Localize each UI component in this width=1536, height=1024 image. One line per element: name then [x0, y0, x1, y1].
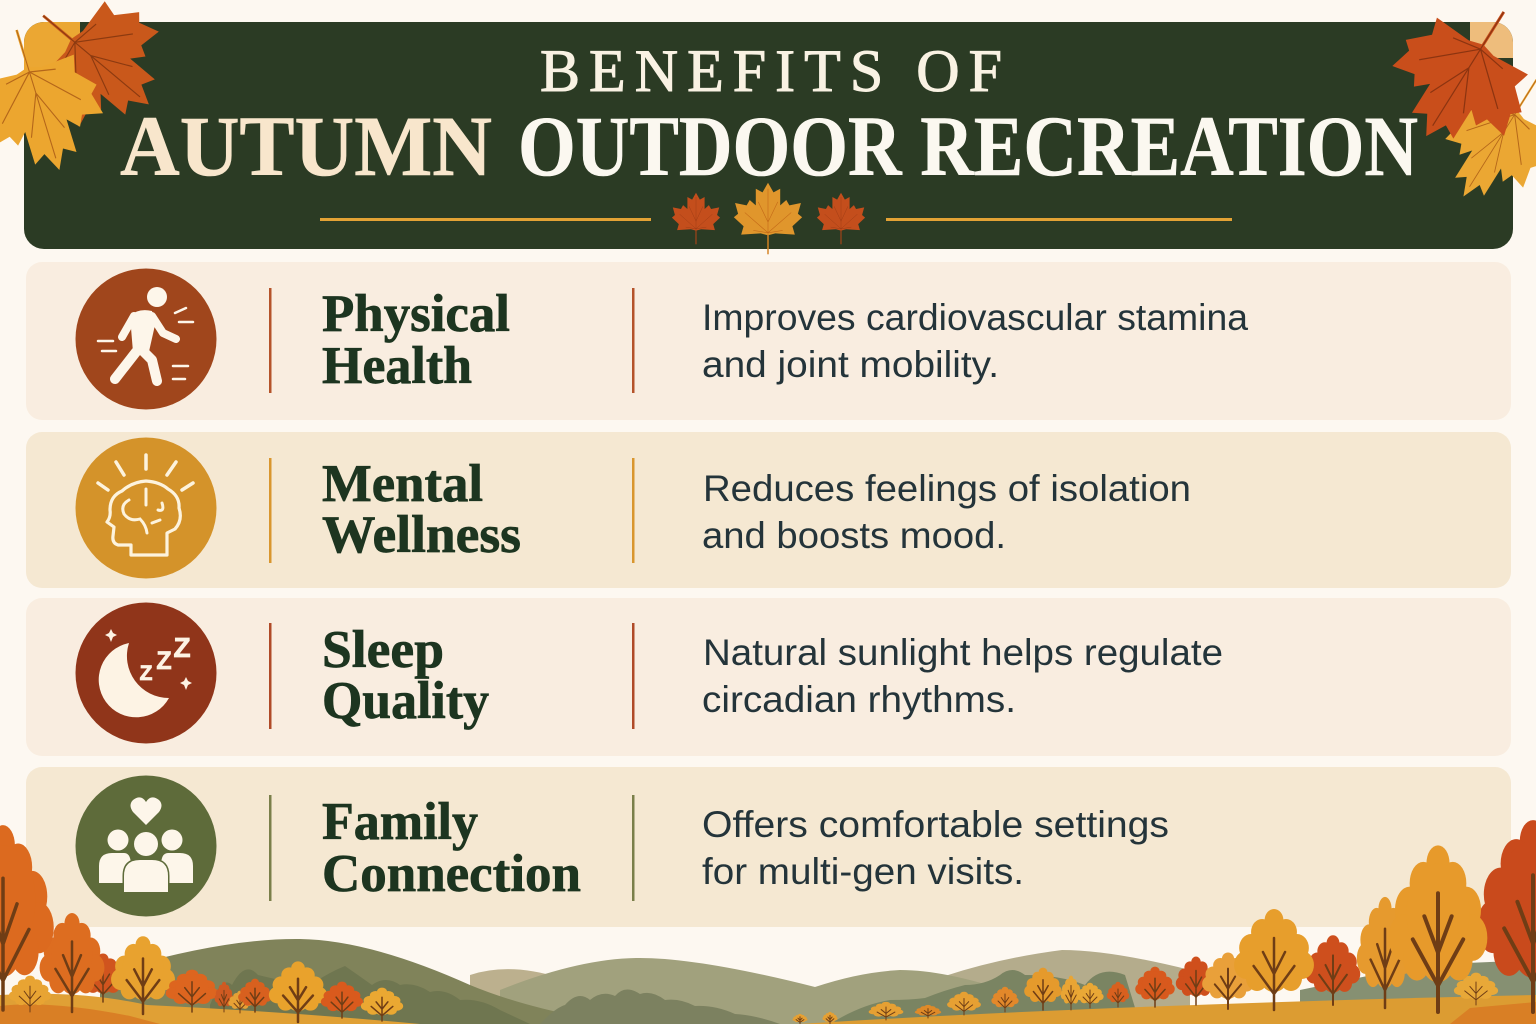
- corner leaves: top left: [0, 0, 190, 188]
- trees: right group: [792, 820, 1536, 1024]
- panel: physical health: [26, 262, 1511, 420]
- icon: moon and stars: Z: [140, 662, 153, 685]
- icon: walking person: [76, 268, 216, 410]
- text: physical health description: [702, 297, 1248, 385]
- hills: [100, 939, 1536, 1024]
- icon: family with heart: [76, 776, 216, 916]
- heading: mental wellness: [322, 455, 521, 564]
- text: physical health description: and joint mobility.: [702, 344, 999, 385]
- text: family connection description: [702, 804, 1169, 892]
- heading: mental wellness: Mental: [322, 455, 483, 513]
- heading: physical health: [322, 285, 510, 395]
- text: sleep quality description: Natural sunlight helps regulate: [703, 632, 1223, 673]
- title: autumn outdoor recreation: OUTDOOR RECREATION: [518, 98, 1418, 194]
- heading: sleep quality: Quality: [322, 672, 489, 730]
- header ornament: rules and three maple leaves: [320, 183, 1232, 254]
- text: sleep quality description: [702, 632, 1223, 720]
- trees: left group: [0, 825, 403, 1022]
- text: mental wellness description: and boosts mood.: [702, 515, 1006, 556]
- text: mental wellness description: [702, 468, 1191, 556]
- title: autumn outdoor recreation: AUTUMN: [120, 98, 492, 194]
- heading: family connection: [322, 793, 581, 903]
- heading: mental wellness: Wellness: [322, 506, 521, 564]
- text: family connection description: Offers comfortable settings: [702, 804, 1169, 845]
- panel: mental wellness: [26, 432, 1511, 588]
- panel: sleep quality: [26, 598, 1511, 756]
- header banner: [24, 22, 1513, 249]
- text: mental wellness description: Reduces feelings of isolation: [703, 468, 1191, 509]
- icon: moon and stars: [76, 602, 216, 744]
- heading: family connection: Family: [322, 793, 478, 851]
- background forest: [210, 966, 1140, 1024]
- panel: family connection: [26, 767, 1511, 927]
- title: benefits of: BENEFITS OF: [540, 38, 1002, 104]
- landscape: hills, forest, trees and meadow: [0, 820, 1536, 1024]
- icon: moon and stars: Z: [156, 647, 172, 675]
- icon: moon and stars: Z: [173, 632, 191, 663]
- text: physical health description: Improves cardiovascular stamina: [702, 297, 1248, 338]
- heading: sleep quality: Sleep: [322, 621, 444, 679]
- icon: brain with rays: [76, 438, 216, 578]
- heading: physical health: Physical: [322, 285, 510, 343]
- heading: sleep quality: [322, 621, 489, 730]
- corner leaves: top right: [1368, 0, 1536, 222]
- text: sleep quality description: circadian rhythms.: [702, 679, 1016, 720]
- meadow: [0, 994, 1536, 1024]
- heading: family connection: Connection: [322, 845, 581, 903]
- text: family connection description: for multi-gen visits.: [702, 851, 1024, 892]
- heading: physical health: Health: [322, 337, 472, 395]
- title: autumn outdoor recreation: [120, 98, 1418, 194]
